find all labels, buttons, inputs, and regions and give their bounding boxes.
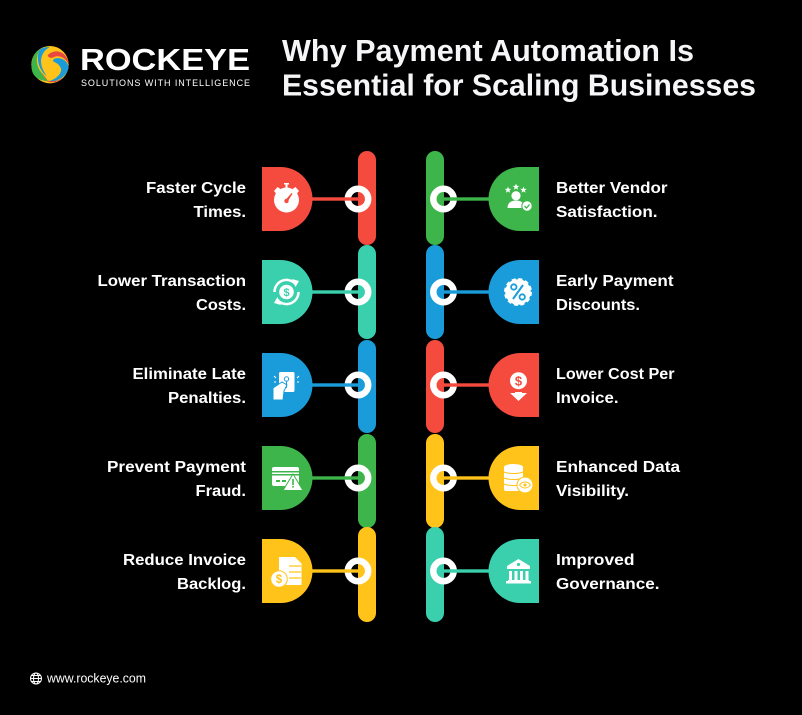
left label 1	[146, 180, 246, 221]
right label 1: Better Vendor	[556, 180, 668, 197]
left label 1: Faster Cycle	[146, 180, 246, 197]
right label 1: Satisfaction.	[556, 204, 658, 221]
right label 2: Early Payment	[556, 273, 674, 290]
right row: Enhanced Data Visibility	[426, 434, 680, 528]
icon: bank building	[506, 559, 531, 584]
icon: dollar down arrow: $	[515, 374, 523, 388]
right label 3: Lower Cost Per	[556, 366, 674, 383]
logo tagline: SOLUTIONS WITH INTELLIGENCE	[81, 78, 250, 88]
title: Why Payment Automation Is	[282, 33, 694, 68]
left label 5: Backlog.	[177, 576, 246, 593]
right label 1	[556, 180, 668, 221]
panel: right column	[426, 151, 680, 622]
left label 3	[132, 366, 246, 407]
right label 5	[556, 552, 660, 593]
right row: Improved Governance	[426, 527, 660, 622]
icon: stopwatch	[274, 183, 299, 212]
icon: circular dollar arrows: $	[283, 287, 290, 299]
right label 5: Improved	[556, 552, 634, 569]
website text: www.rockeye.com	[46, 670, 146, 686]
left label 2	[98, 273, 246, 314]
title: Essential for Scaling Businesses	[282, 68, 756, 102]
icon: card with warning	[272, 467, 303, 490]
right label 3: Invoice.	[556, 390, 618, 407]
right label 4	[556, 459, 680, 500]
left label 4: Fraud.	[196, 483, 246, 500]
left label 4: Prevent Payment	[107, 459, 246, 476]
left label 3: Penalties.	[168, 390, 246, 407]
right label 3	[556, 366, 674, 407]
right label 2	[556, 273, 674, 314]
right row: Lower Cost Per Invoice	[426, 340, 674, 433]
right row: Early Payment Discounts	[426, 245, 674, 339]
left row: Eliminate Late Penalties	[132, 340, 376, 433]
left label 1: Times.	[194, 204, 246, 221]
panel: left column	[98, 151, 376, 622]
left row: Reduce Invoice Backlog	[123, 527, 376, 622]
left row: Faster Cycle Times	[146, 151, 376, 245]
left label 5	[123, 552, 246, 593]
left row: Lower Transaction Costs	[98, 245, 376, 339]
left label 3: Eliminate Late	[132, 366, 246, 383]
icon: globe	[30, 673, 42, 684]
left label 2: Costs.	[196, 297, 246, 314]
icon: invoice with dollar coin: $	[276, 574, 283, 586]
logo wordmark: ROCKEYE	[80, 42, 250, 77]
icon: dollar down arrow	[510, 372, 527, 401]
icon: invoice with dollar coin	[271, 557, 302, 587]
right label 4: Enhanced Data	[556, 459, 680, 476]
left label 2: Lower Transaction	[98, 273, 246, 290]
left label 5: Reduce Invoice	[123, 552, 246, 569]
right label 2: Discounts.	[556, 297, 640, 314]
left label 4	[107, 459, 246, 500]
right label 5: Governance.	[556, 576, 660, 593]
title	[282, 33, 756, 102]
icon: hand holding phone	[273, 372, 299, 400]
logo	[31, 42, 250, 88]
icon: percent badge	[505, 279, 531, 305]
left row: Prevent Payment Fraud	[107, 434, 376, 528]
logo swirl	[31, 46, 69, 83]
icon: circular dollar arrows	[274, 279, 299, 305]
icon: rated user	[505, 184, 532, 211]
right row: Better Vendor Satisfaction	[426, 151, 668, 245]
footer website	[30, 670, 146, 686]
icon: coins with eye	[504, 464, 533, 493]
right label 4: Visibility.	[556, 483, 629, 500]
